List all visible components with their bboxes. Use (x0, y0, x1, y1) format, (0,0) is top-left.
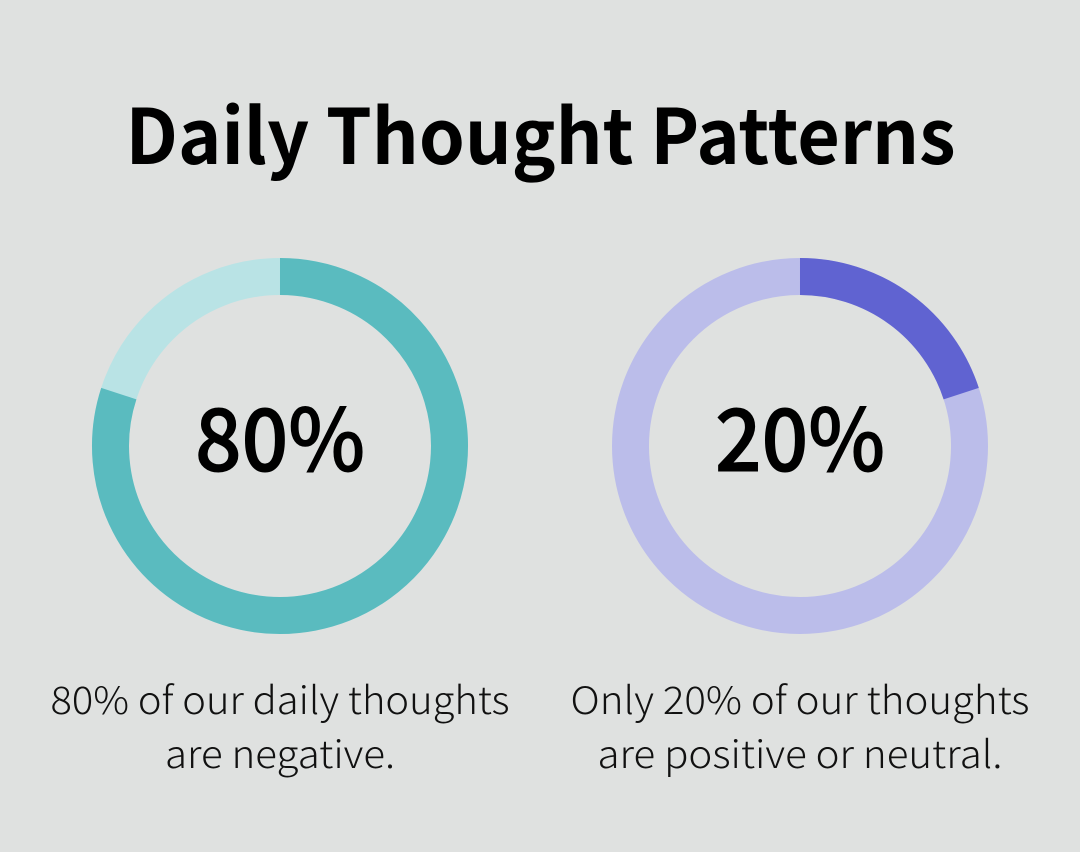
title: Daily Thought Patterns (126, 76, 956, 186)
donut chart: 80% negative: 80% (195, 371, 365, 496)
caption: negative thoughts: are negative. (165, 724, 395, 779)
caption: negative thoughts (50, 670, 510, 779)
donut chart: 20% positive: 20% (715, 371, 885, 496)
caption: positive or neutral thoughts: Only 20% of our thoughts (570, 670, 1030, 725)
caption: positive or neutral thoughts (570, 670, 1030, 779)
donut chart: 20% positive (630, 276, 970, 616)
donut chart: 80% negative (110, 276, 449, 616)
caption: negative thoughts: 80% of our daily thoughts (50, 670, 510, 725)
caption: positive or neutral thoughts: are positive or neutral. (598, 724, 1002, 779)
